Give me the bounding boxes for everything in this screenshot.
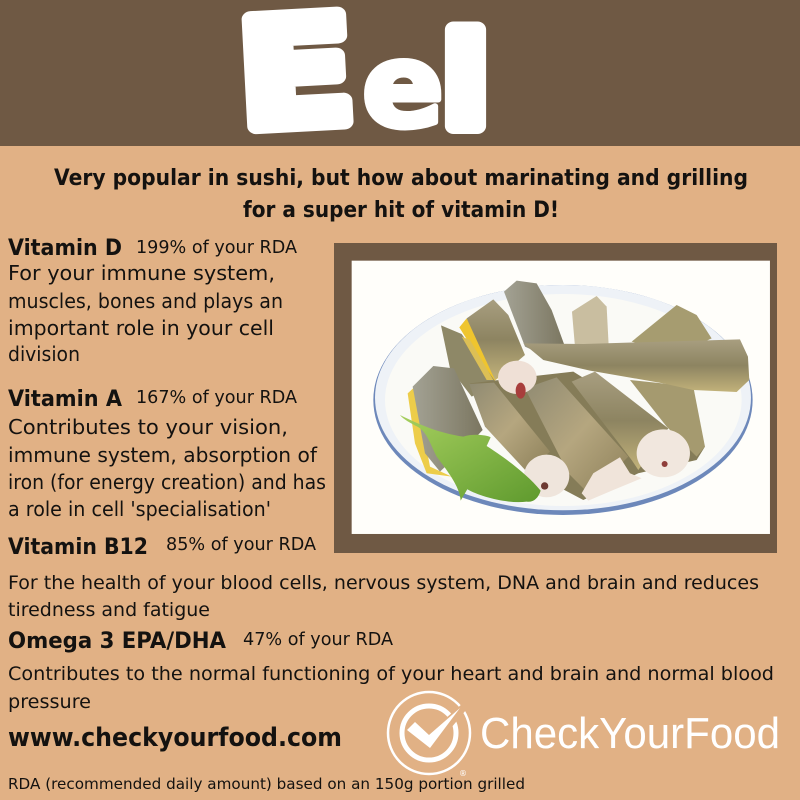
- vitamin D block: 199% of your RDA: [136, 237, 298, 258]
- title: l: [442, 8, 489, 156]
- vitamin B12 block: Vitamin B12: [8, 535, 148, 560]
- intro text: for a super hit of vitamin D!: [243, 198, 559, 223]
- vitamin A block: [8, 387, 326, 521]
- vitamin D block: division: [8, 342, 80, 366]
- cut faces: [498, 361, 537, 394]
- long eel: [523, 339, 749, 392]
- omega 3 block: Contributes to the normal functioning of your heart and brain and normal blood: [8, 663, 774, 685]
- vitamin D block: muscles, bones and plays an: [8, 289, 283, 313]
- registered mark: ®: [459, 769, 467, 778]
- vitamin D block: [8, 236, 298, 366]
- vitamin B12 block: tiredness and fatigue: [8, 599, 210, 621]
- vitamin A block: 167% of your RDA: [136, 387, 298, 408]
- omega 3 block: [8, 629, 774, 713]
- header band: [0, 0, 800, 146]
- vitamin A block: Contributes to your vision,: [8, 415, 288, 439]
- title: e: [362, 19, 444, 154]
- footnote: RDA (recommended daily amount) based on an 150g portion grilled: [8, 775, 525, 793]
- vitamin A block: Vitamin A: [8, 387, 122, 412]
- logo wordmark: CheckYourFood: [480, 709, 780, 758]
- intro text: [54, 166, 748, 223]
- omega 3 block: pressure: [8, 691, 91, 713]
- lettuce leaf: [400, 415, 541, 502]
- eel backing: [470, 372, 705, 500]
- vitamin D block: For your immune system,: [8, 261, 275, 285]
- vitamin A block: iron (for energy creation) and has: [8, 470, 326, 494]
- plate: [373, 285, 753, 515]
- vitamin D block: Vitamin D: [8, 236, 122, 261]
- vitamin B12 block: [8, 534, 759, 621]
- vitamin B12 block: 85% of your RDA: [166, 534, 317, 555]
- intro text: Very popular in sushi, but how about marinating and grilling: [54, 166, 748, 191]
- title: [234, 0, 489, 162]
- photo: plate of eel: [352, 261, 770, 534]
- vitamin B12 block: For the health of your blood cells, nervous system, DNA and brain and reduces: [8, 572, 759, 594]
- omega 3 block: 47% of your RDA: [243, 629, 394, 650]
- vitamin A block: a role in cell 'specialisation': [8, 497, 271, 521]
- logo: check mark in circle: [388, 692, 470, 774]
- photo frame: [334, 243, 777, 553]
- vitamin D block: important role in your cell: [8, 316, 274, 340]
- eel pieces: [632, 305, 712, 353]
- omega 3 block: Omega 3 EPA/DHA: [8, 629, 226, 654]
- website: www.checkyourfood.com: [8, 723, 342, 753]
- vitamin A block: immune system, absorption of: [8, 443, 318, 467]
